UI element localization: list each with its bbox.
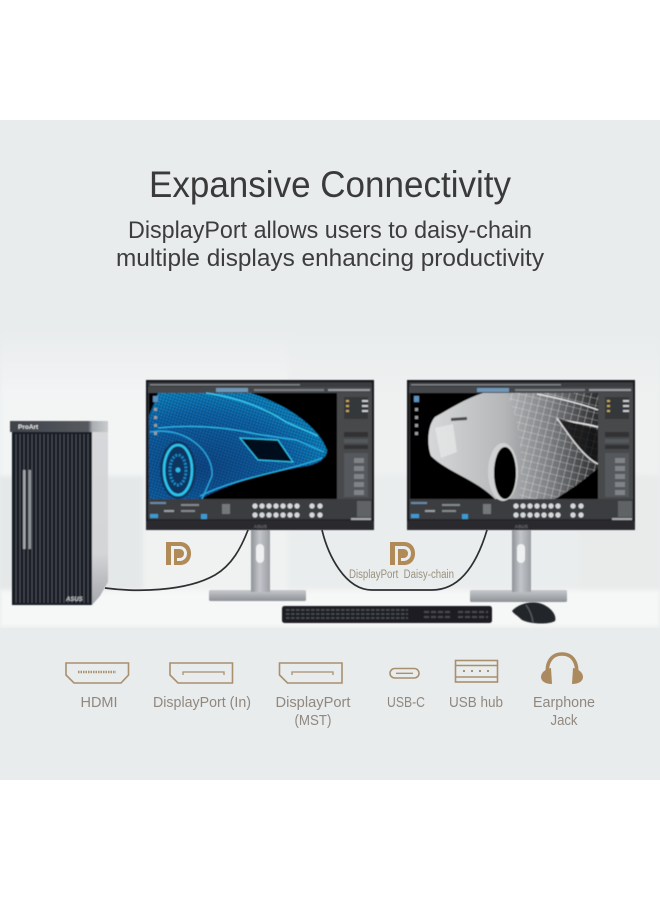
mouse [512,602,555,624]
port icon: DisplayPort MST [280,663,342,683]
PC tower: ASUS [65,597,83,603]
label: DisplayPort MST [276,695,350,729]
daisy-chain cable [322,530,487,590]
keyboard [282,606,492,623]
desk scene background [0,330,660,780]
cable: tower to monitor [105,530,248,590]
subtitle: multiple displays enhancing productivity [116,245,545,272]
monitor stand: right [470,530,567,602]
monitor stand: left [209,530,306,601]
label: USB hub: USB hub [449,695,503,711]
label: USB-C: USB-C [387,695,425,711]
monitor right with grey car render [407,380,635,530]
label: Earphone Jack: Jack [550,713,578,729]
label: DisplayPort MST: (MST) [294,713,332,729]
label: DisplayPort MST: DisplayPort [276,695,350,711]
title: Expansive Connectivity [149,164,511,205]
PC tower: ProArt [18,424,39,431]
port icon: HDMI [66,663,128,683]
subtitle [116,217,545,272]
DisplayPort Daisy-chain label: DisplayPort Daisy-chain [349,569,454,581]
monitor left with blue wireframe car [146,380,374,530]
label: HDMI: HDMI [80,695,118,711]
label: DisplayPort In: DisplayPort (In) [153,695,251,711]
icon: earphone [541,654,583,684]
port icon: DisplayPort In [170,663,232,683]
background panel [0,120,660,780]
port icon: USB-C [390,668,419,678]
label: Earphone Jack: Earphone [533,695,595,711]
label: Earphone Jack [533,695,595,729]
subtitle: DisplayPort allows users to daisy-chain [128,217,532,244]
DisplayPort logo: centre [390,542,415,565]
DisplayPort logo: left [166,542,191,565]
port icon: USB hub [456,660,498,682]
PC tower [10,421,108,605]
